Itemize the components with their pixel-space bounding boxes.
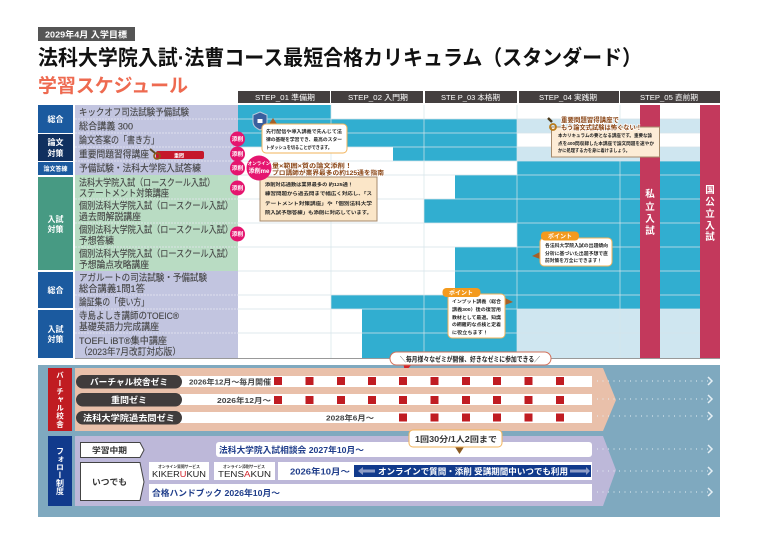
exam column: national: 入 [705, 221, 715, 232]
category labels: 総合 [48, 114, 64, 124]
panel: virtual school [48, 368, 616, 431]
category labels [38, 105, 73, 358]
banner: monthly seminars: ＼毎月様々なゼミが開催、好きなゼミに参加できる／ [400, 354, 540, 364]
online correction badge [246, 156, 272, 180]
correction badges: 添削 [232, 230, 243, 238]
course name column: ステートメント対策講座 [79, 188, 169, 200]
course name column: 寺島よしき講師のTOEIC® [79, 310, 179, 322]
course name column: TOEFL iBT®集中講座 [79, 335, 167, 347]
consultation row [216, 442, 592, 457]
step headers: STE P_03 本格期 [441, 92, 500, 102]
callout: correction [260, 162, 384, 221]
online service row: オンラインで質問・添削 受講期間中いつでも利用 [378, 466, 568, 476]
schedule grid [238, 105, 700, 358]
seminar: past questions: 2026年12月～ [217, 395, 272, 405]
course name column: 個別法科大学院入試（ロースクール入試） [79, 224, 233, 236]
category labels: 入試 [48, 215, 64, 224]
schedule bars [238, 105, 700, 358]
vertical label: follow-up: フォロー制度 [56, 447, 64, 496]
online service row [278, 462, 592, 480]
callout: point input course: 教材として最適。知識 [452, 314, 501, 321]
category labels: 論文 [48, 137, 64, 147]
callout: key course: 重要問題習得講座で [561, 115, 619, 124]
correction badges: 添削 [232, 150, 243, 158]
follow-up panel background [38, 365, 720, 517]
category labels: 対策 [48, 224, 64, 234]
callout: point input course [442, 288, 513, 338]
callout: correction: 量×範囲×質の論文添削！ [272, 162, 352, 170]
course name column: 予備試験・法科大学院入試答練 [79, 162, 201, 174]
stage: anytime: いつでも [92, 477, 127, 487]
category labels: 総合 [48, 285, 64, 295]
course name column: （2023年7月改訂対応版） [79, 346, 181, 358]
callout: preview course: 先行配信や導入講義で先んじて法 [266, 128, 342, 135]
key icon and important tag: 重問 [174, 152, 184, 160]
course name column: 予想論点攻略講座 [79, 259, 149, 271]
consultation row: 法科大学院入試相談会 2027年10月～ [219, 445, 365, 455]
handbook row [149, 484, 592, 501]
callout: key course [548, 115, 660, 157]
stage: mid study [80, 442, 144, 458]
vertical label: virtual school: バーチャル校舎 [55, 371, 64, 429]
callout: key course: かに処理する力を身に着けましょう。 [558, 147, 630, 154]
callout: key course: 点を400問収録した本講座で論文問題を速やか [558, 140, 654, 147]
seminar: virtual school: 2026年12月～毎月開催 [189, 376, 272, 386]
banner: monthly seminars [390, 352, 551, 372]
callout: point exam trends: 前対策を万全にできます！ [545, 257, 602, 264]
online correction badge: オンライン [248, 160, 271, 167]
callout: correction: 院入試予想答練」も添削に対応しています。 [265, 209, 372, 216]
vertical label: follow-up [48, 436, 72, 506]
category labels: 論文答練 [43, 165, 68, 173]
callout: point exam trends [532, 232, 612, 266]
row bands [180, 376, 592, 423]
course name column: 基礎英語力完成講座 [79, 321, 159, 333]
step headers: STEP_01 準備期 [255, 92, 315, 102]
logo: TENSAKUN: オンライン添削サービス [223, 464, 265, 469]
logo: KIKERUKUN: KIKER UKUN [152, 470, 206, 479]
peach arrow [75, 368, 616, 431]
exam column: private [640, 105, 660, 358]
subtitle: 学習スケジュール [38, 74, 188, 97]
category labels: 対策 [48, 148, 64, 158]
course name column: 論文答案の「書き方」 [79, 134, 159, 146]
course name column: 総合講義1問1答 [79, 283, 145, 295]
callout: preview course: 律の基礎を学習でき、最高のスター [266, 136, 342, 143]
stage: mid study: 学習中期 [92, 445, 127, 455]
exam column: national: 公 [705, 197, 715, 208]
callout: key course: 本カリキュラムの要となる講座です。重要な論 [558, 132, 652, 139]
course name column: 法科大学院入試（ロースクール入試） [79, 177, 215, 189]
exam column: private: 試 [645, 226, 655, 237]
callout: session limit: 1回30分/1人2回まで [415, 434, 497, 444]
title: 法科大学院入試·法曹コース最短合格カリキュラム（スタンダード） [38, 46, 642, 70]
exam column: national: 国 [705, 185, 715, 196]
seminar: past questions [76, 393, 272, 406]
logo: KIKERUKUN: オンライン質問サービス [158, 464, 200, 469]
correction badges: 添削 [232, 184, 243, 192]
callout: preview course [262, 118, 347, 153]
callout: correction: テートメント対策講座」や「個別法科大学 [265, 200, 372, 207]
course name column: 予想答練 [79, 235, 114, 247]
callout: point input course: ポイント [449, 289, 473, 297]
red session squares [274, 377, 564, 422]
exam column: national: 立 [705, 208, 715, 220]
logo: KIKERUKUN [149, 462, 209, 480]
callout: point input course: に役立ちます！ [452, 329, 488, 336]
seminar: law school past exams: 法科大学院過去問ゼミ [83, 413, 175, 423]
callout: point input course: インプット講義（総合 [452, 298, 501, 305]
target date tag: 2029年4月 入学目標 [45, 30, 128, 40]
callout: point exam trends: 分析に基づいた出題予想で直 [545, 250, 608, 257]
course name column: アガルートの司法試験・予備試験 [79, 272, 207, 284]
step headers: STEP_05 直前期 [640, 92, 698, 102]
handbook row: 合格ハンドブック 2026年10月～ [152, 488, 281, 498]
correction badges [230, 132, 245, 242]
online service row: 2026年10月～ [290, 466, 351, 476]
logo: TENSAKUN: TENS AKUN [218, 470, 271, 479]
chart baseline [75, 358, 720, 360]
seminar: past questions: 重問ゼミ [111, 395, 147, 405]
callout: key course: もう論文式試験は怖くない！ [561, 122, 642, 132]
course name column: 重要問題習得講座 [79, 148, 149, 160]
shield icon [253, 112, 267, 130]
course name column: キックオフ司法試験予備試験 [79, 106, 189, 118]
exam column: national [700, 105, 720, 358]
seminar: virtual school [76, 375, 272, 388]
category labels: 入試 [48, 325, 64, 334]
callout: point input course: の網羅的な点検と定着 [452, 321, 501, 328]
callout: session limit [409, 430, 502, 454]
course name column [75, 105, 238, 358]
course name column: 個別法科大学院入試（ロースクール入試） [79, 200, 233, 212]
seminar: law school past exams: 2028年6月～ [326, 412, 375, 422]
course name column: 個別法科大学院入試（ロースクール入試） [79, 248, 233, 260]
lavender arrow [75, 436, 616, 506]
step headers: STEP_02 入門期 [348, 93, 408, 102]
logo: TENSAKUN [214, 462, 275, 480]
step headers: STEP_04 実践期 [539, 92, 597, 102]
exam column: private: 入 [645, 214, 655, 225]
online correction badge: 添削me [249, 167, 270, 175]
key icon and important tag [150, 149, 204, 160]
course name column: 過去問解説講座 [79, 211, 141, 223]
callout: point exam trends: ポイント [548, 232, 572, 240]
dotted arrows [597, 377, 712, 496]
exam column: national: 試 [705, 232, 715, 243]
callout: correction: プロ講師が業界最多の約125通を指南 [272, 169, 384, 177]
vertical label: virtual school [48, 368, 72, 431]
callout: point exam trends: 各法科大学院入試の出題傾向 [545, 242, 608, 249]
exam column: private: 立 [645, 201, 655, 213]
target date tag [38, 27, 135, 41]
course name column: 総合講義 300 [79, 120, 133, 132]
callout: point input course: 講義300）後の復習用 [452, 306, 501, 313]
stage: anytime [80, 462, 144, 500]
course name column: 論証集の「使い方」 [79, 296, 149, 308]
exam column: private: 私 [645, 188, 655, 200]
panel: follow-up system [48, 436, 616, 506]
seminar: virtual school: バーチャル校舎ゼミ [90, 377, 168, 387]
correction badges: 添削 [232, 135, 243, 143]
callout: correction: 練習問題から過去問まで幅広く対応し、「ス [265, 190, 372, 197]
callout: preview course: トダッシュを切ることができます。 [266, 144, 332, 151]
category labels: 対策 [48, 334, 64, 344]
step headers [238, 91, 720, 103]
callout: correction: 添削対応通数は業界最多の 約125通！ [265, 181, 353, 188]
correction badges: 添削 [232, 164, 243, 172]
seminar: law school past exams [76, 411, 375, 424]
